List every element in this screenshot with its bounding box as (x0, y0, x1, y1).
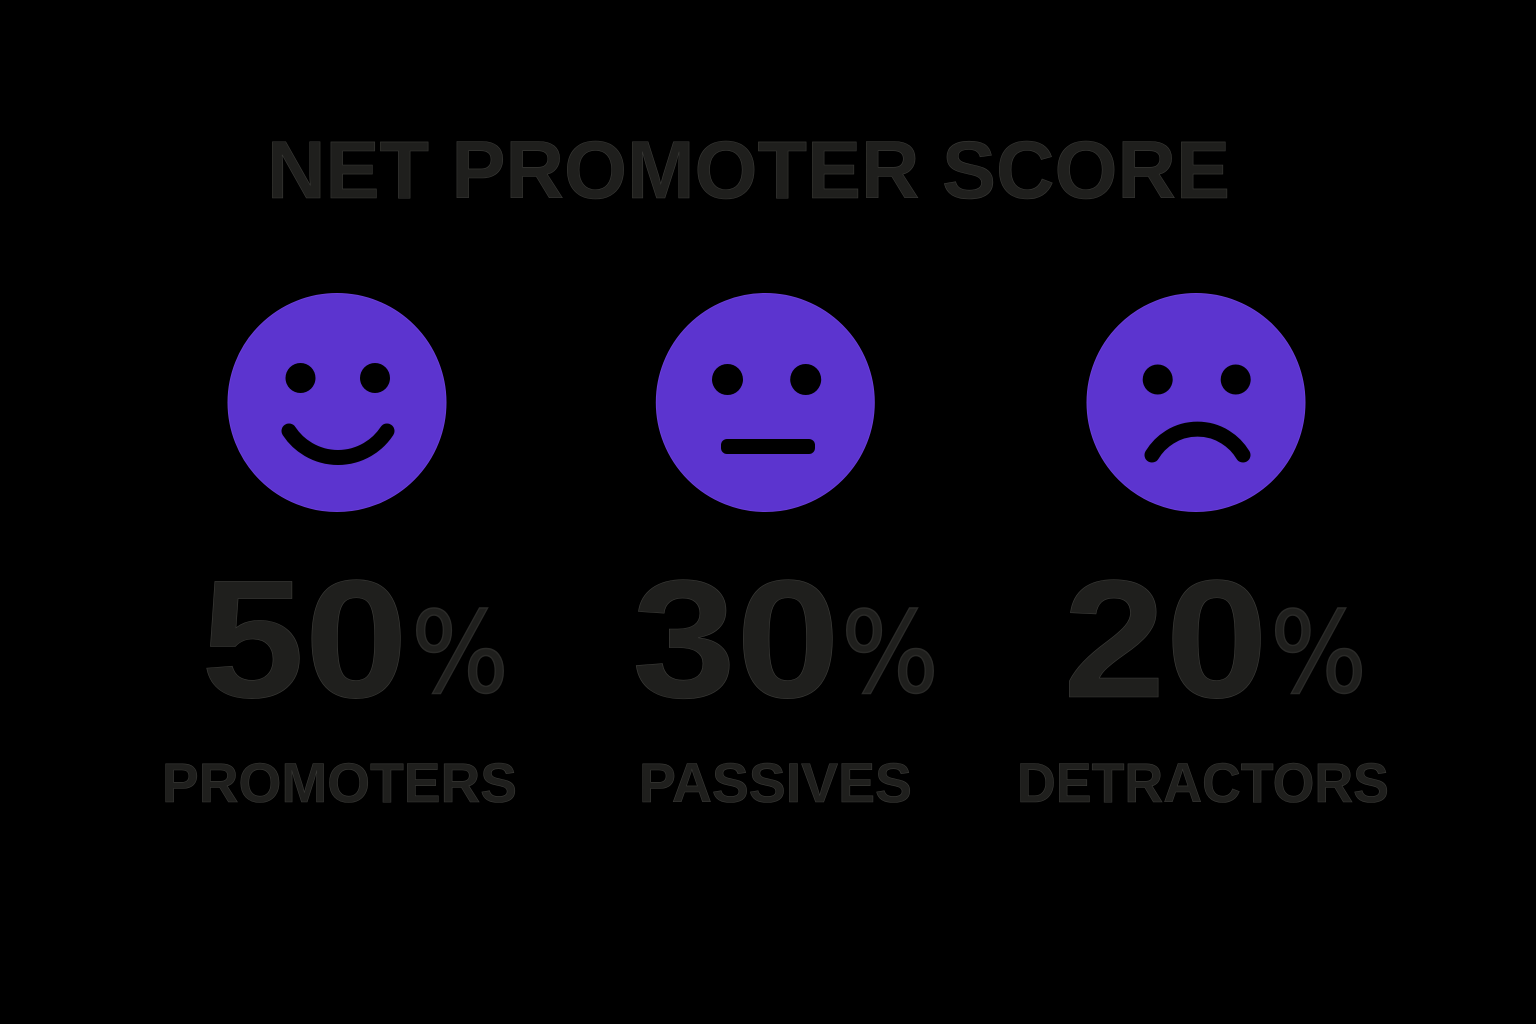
passives percentage (632, 545, 939, 733)
icon: neutral face (656, 294, 874, 512)
detractors percentage: 20 (1063, 545, 1268, 733)
panel: promoters (162, 294, 517, 814)
promoters percentage: % (411, 587, 509, 719)
passives percentage: 30 (632, 545, 840, 733)
detractors label: DETRACTORS (1017, 751, 1389, 814)
promoters label: PROMOTERS (162, 751, 517, 814)
title: NET PROMOTER SCORE (267, 125, 1230, 216)
detractors percentage: % (1270, 587, 1367, 719)
panel: detractors (1017, 294, 1389, 814)
passives percentage: % (841, 587, 939, 719)
detractors percentage (1063, 545, 1367, 733)
panel: passives (632, 294, 939, 814)
icon: smiling face (228, 294, 446, 512)
passives label: PASSIVES (639, 751, 912, 814)
promoters percentage: 50 (201, 545, 408, 733)
promoters percentage (201, 545, 509, 733)
icon: frowning face (1087, 294, 1305, 512)
